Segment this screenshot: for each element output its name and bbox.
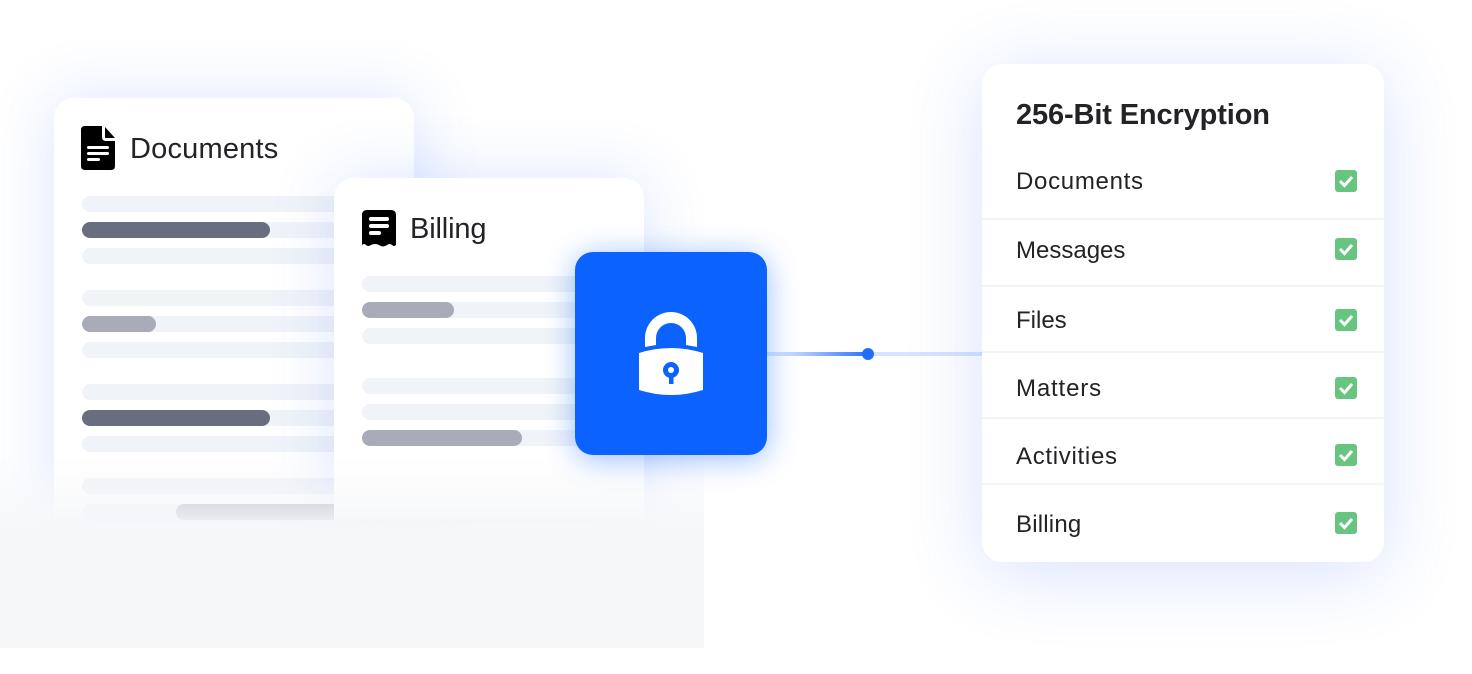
- row: activities: [1016, 443, 1357, 470]
- check: [1335, 444, 1357, 466]
- lock tile: [575, 252, 767, 455]
- connector dot: [862, 348, 874, 360]
- icon: document: [81, 126, 115, 170]
- left card stack: [0, 75, 704, 648]
- row: matters: [1016, 375, 1357, 402]
- row: billing: [1016, 511, 1357, 538]
- row: documents: [1016, 168, 1357, 195]
- check: [1335, 170, 1357, 192]
- check: [1335, 309, 1357, 331]
- row: documents: Documents: [1016, 168, 1144, 195]
- heading: 256-bit encryption: 256-Bit Encryption: [1016, 99, 1270, 131]
- panel: billing: [334, 178, 644, 520]
- panel: 256-bit encryption: [982, 64, 1384, 562]
- row: messages: Messages: [1016, 237, 1125, 264]
- placeholder lines: billing: [362, 276, 578, 446]
- row: messages: [1016, 237, 1357, 264]
- row: billing: Billing: [1016, 511, 1081, 538]
- fade overlay: [0, 456, 704, 648]
- icon: padlock: [639, 312, 703, 395]
- check: [1335, 512, 1357, 534]
- icon: receipt: [362, 210, 396, 246]
- check: [1335, 377, 1357, 399]
- row: matters: Matters: [1016, 375, 1102, 402]
- row: activities: Activities: [1016, 443, 1118, 470]
- connector line: [767, 352, 982, 356]
- panel: documents: [54, 98, 414, 520]
- heading: billing: Billing: [410, 213, 486, 245]
- row: files: Files: [1016, 307, 1067, 334]
- row: files: [1016, 307, 1357, 334]
- check: [1335, 238, 1357, 260]
- heading: documents: Documents: [130, 133, 278, 165]
- placeholder lines: documents: [82, 196, 334, 520]
